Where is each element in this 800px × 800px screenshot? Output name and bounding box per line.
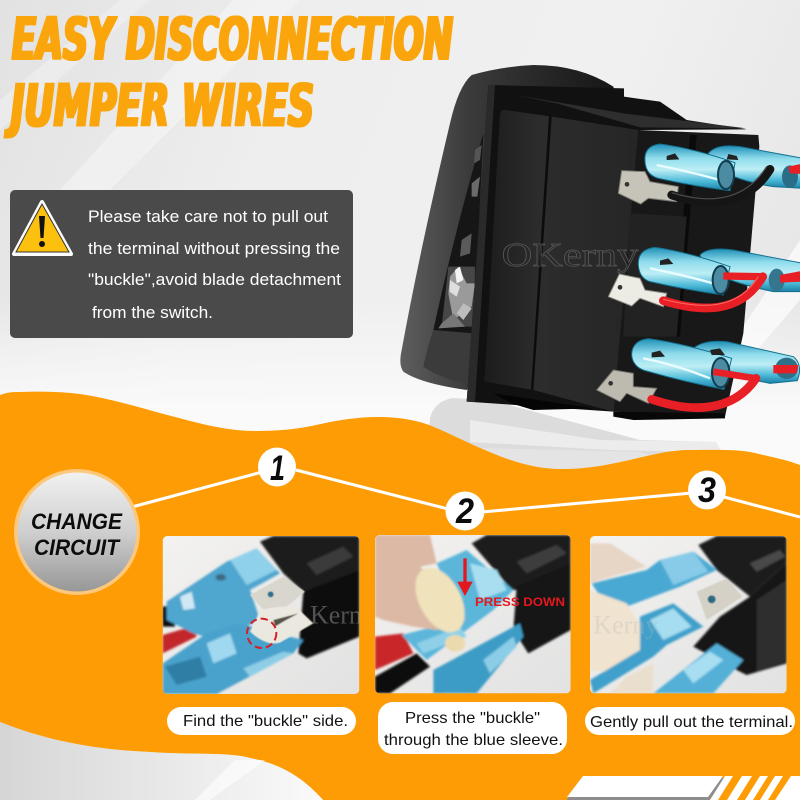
press down label: PRESS DOWN [475,596,565,609]
photo 3: pull out [590,536,787,693]
step badge 3: 3 [698,471,716,510]
warning text: "buckle",avoid blade detachment [88,271,341,289]
step badge 2: 2 [455,492,474,531]
step badge 1 [258,448,296,488]
bottom-right stripe decoration [565,776,800,800]
photo 3: pull out: Kerny [593,610,658,639]
step badge 1: 1 [270,449,285,488]
photo 1: find buckle: Kerny [310,600,375,629]
warning text [88,208,341,322]
caption 2: Press the "buckle" [405,710,540,727]
icon: warning triangle [14,202,71,254]
caption 3 [585,707,795,735]
orange wave band [0,392,800,800]
caption 1 [167,707,356,735]
warning text: from the switch. [92,304,213,322]
warning text: the terminal without pressing the [88,240,340,258]
warning text: Please take care not to pull out [88,208,328,226]
bottom-left grey corner [0,722,323,800]
switch product photo [400,65,800,420]
terminal row 2 [608,247,800,308]
switch housing [467,85,759,420]
arrow: press down [457,558,473,596]
rocker cap [400,65,633,390]
title: JUMPER WIRES [5,71,314,140]
title: EASY DISCONNECTION [12,4,453,74]
circle: change circuit [14,469,140,595]
terminal row 1 [618,144,800,204]
step badge 2 [446,492,484,531]
photo 1: find buckle [163,536,375,694]
red dashed circle [247,619,276,648]
warning panel [10,190,353,338]
terminal row 3 [597,339,800,408]
circle: change circuit: CHANGE [31,509,123,534]
caption 2: through the blue sleeve. [384,732,563,749]
circle: change circuit: CIRCUIT [34,535,120,560]
connector lines [132,470,800,517]
caption 1: Find the "buckle" side. [183,713,348,730]
photo 2: press down [375,535,571,693]
caption 3: Gently pull out the terminal. [590,714,793,731]
watermark: OKerny [502,237,639,274]
step badge 3 [688,470,726,510]
caption 2 [378,702,567,754]
pedestal shadow under switch [426,398,730,480]
title [5,4,453,140]
